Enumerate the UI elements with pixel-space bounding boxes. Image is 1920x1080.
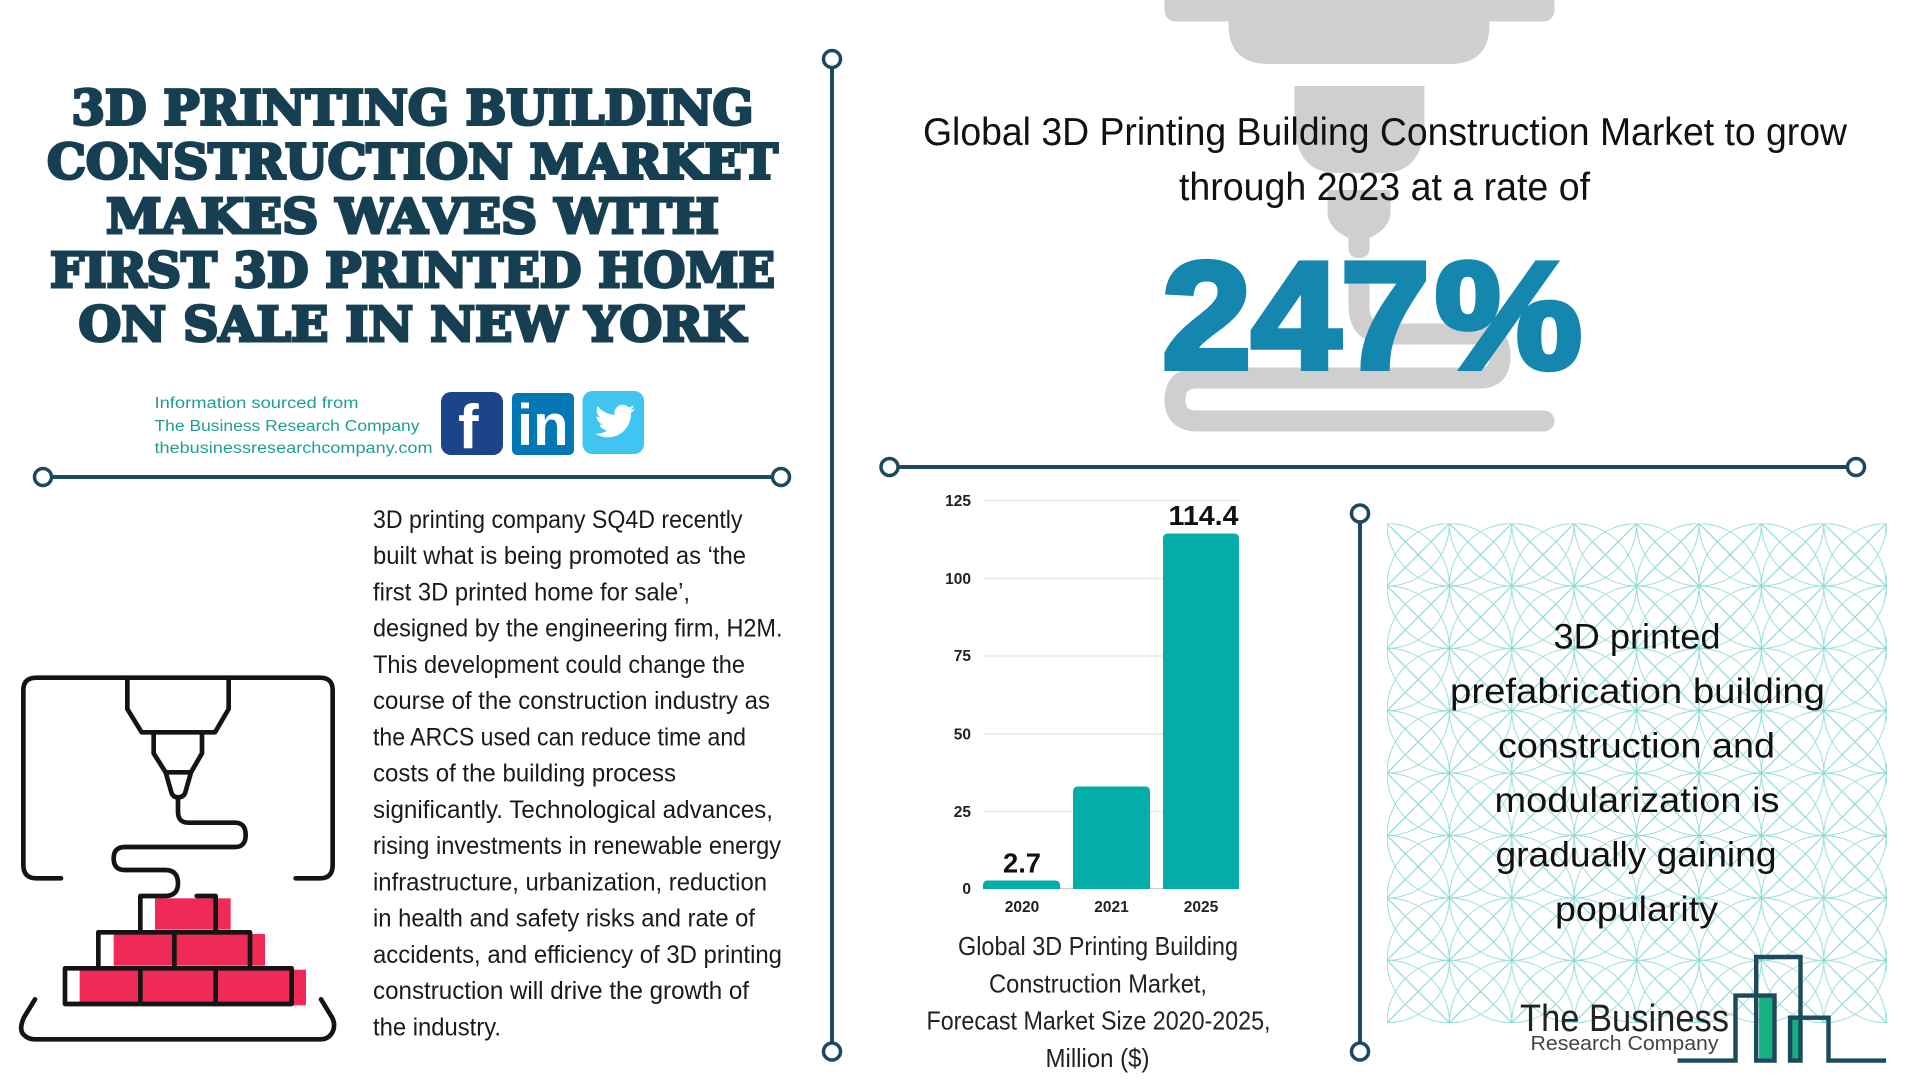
social icons xyxy=(441,391,644,462)
connector: centre vertical xyxy=(824,50,840,1060)
big statistic: 247%: 247 xyxy=(1162,231,1430,401)
callout text: popularity xyxy=(1555,890,1719,929)
body paragraph: This development could change the xyxy=(373,651,745,679)
bar chart xyxy=(945,493,1239,916)
value labels: 114.4 xyxy=(1168,500,1239,531)
x axis labels: 2020 xyxy=(1005,899,1039,916)
body paragraph: the industry. xyxy=(373,1013,501,1041)
big statistic: 247% xyxy=(1162,231,1582,401)
callout text xyxy=(1450,618,1825,929)
icon: grey printer nozzle watermark xyxy=(1164,0,1554,421)
title: ON SALE IN NEW YORK xyxy=(78,297,748,353)
logo skyline xyxy=(1678,957,1886,1061)
y axis labels: 75 xyxy=(954,648,971,665)
headline statement xyxy=(923,111,1848,209)
body paragraph: course of the construction industry as xyxy=(373,687,770,715)
chart caption: Million ($) xyxy=(1046,1043,1150,1073)
body paragraph: infrastructure, urbanization, reduction xyxy=(373,868,767,896)
chart gridlines xyxy=(983,500,1239,888)
callout text: prefabrication building xyxy=(1450,672,1825,711)
x axis labels: 2021 xyxy=(1094,899,1129,916)
y axis labels: 125 xyxy=(945,493,971,510)
chart caption: Forecast Market Size 2020-2025, xyxy=(926,1006,1270,1036)
body paragraph: the ARCS used can reduce time and xyxy=(373,723,746,751)
value labels: 2.7 xyxy=(1003,848,1041,878)
logo wordmark xyxy=(1520,998,1729,1055)
x axis labels: 2025 xyxy=(1184,899,1219,916)
icon: facebook xyxy=(441,392,503,462)
chart caption xyxy=(926,931,1270,1073)
connector: right vertical xyxy=(1352,505,1368,1060)
callout text: 3D printed xyxy=(1554,618,1720,656)
big statistic: 247%: % xyxy=(1435,231,1582,401)
title: FIRST 3D PRINTED HOME xyxy=(50,243,775,299)
bars xyxy=(983,534,1239,889)
icon: 3D printer with bricks xyxy=(21,678,334,1039)
callout text: construction and xyxy=(1498,726,1775,766)
callout text: gradually gaining xyxy=(1496,836,1776,874)
connector: left horizontal xyxy=(34,468,790,486)
panel: geometric pattern callout xyxy=(1387,524,1887,1023)
body paragraph: in health and safety risks and rate of xyxy=(373,905,755,933)
title: MAKES WAVES WITH xyxy=(106,189,719,245)
y axis labels xyxy=(945,493,971,898)
logo wordmark: Research Company xyxy=(1530,1033,1718,1055)
headline statement: Global 3D Printing Building Construction Market to grow xyxy=(923,111,1848,154)
y axis labels: 25 xyxy=(954,804,971,821)
source attribution: Information sourced from xyxy=(154,395,358,412)
chart caption: Construction Market, xyxy=(989,968,1207,998)
body paragraph: accidents, and efficiency of 3D printing xyxy=(373,941,782,969)
value labels xyxy=(1003,500,1239,878)
body paragraph: designed by the engineering firm, H2M. xyxy=(373,615,782,643)
title: 3D PRINTING BUILDING xyxy=(72,80,754,136)
body paragraph xyxy=(373,506,782,1041)
logo: The Business Research Company xyxy=(1520,957,1886,1061)
body paragraph: construction will drive the growth of xyxy=(373,977,749,1005)
source attribution: The Business Research Company xyxy=(154,418,420,435)
chart caption: Global 3D Printing Building xyxy=(958,931,1238,961)
y axis labels: 100 xyxy=(945,571,971,588)
x axis labels xyxy=(1005,899,1219,916)
y axis labels: 0 xyxy=(962,881,971,898)
title xyxy=(47,80,778,353)
icon: twitter xyxy=(582,391,644,454)
callout text: modularization is xyxy=(1494,781,1780,820)
headline statement: through 2023 at a rate of xyxy=(1179,166,1590,209)
body paragraph: significantly. Technological advances, xyxy=(373,796,773,824)
logo wordmark: The Business xyxy=(1520,998,1729,1040)
source attribution: thebusinessresearchcompany.com xyxy=(154,440,432,457)
body paragraph: first 3D printed home for sale’, xyxy=(373,578,690,606)
body paragraph: 3D printing company SQ4D recently xyxy=(373,506,743,534)
icon: facebook: f xyxy=(458,393,479,462)
source attribution xyxy=(154,395,432,457)
body paragraph: rising investments in renewable energy xyxy=(373,832,781,860)
body paragraph: built what is being promoted as ‘the xyxy=(373,542,746,570)
y axis labels: 50 xyxy=(954,726,971,744)
body paragraph: costs of the building process xyxy=(373,760,676,788)
title: CONSTRUCTION MARKET xyxy=(47,134,778,190)
icon: linkedin: in xyxy=(517,393,569,458)
connector: right horizontal xyxy=(881,458,1864,476)
